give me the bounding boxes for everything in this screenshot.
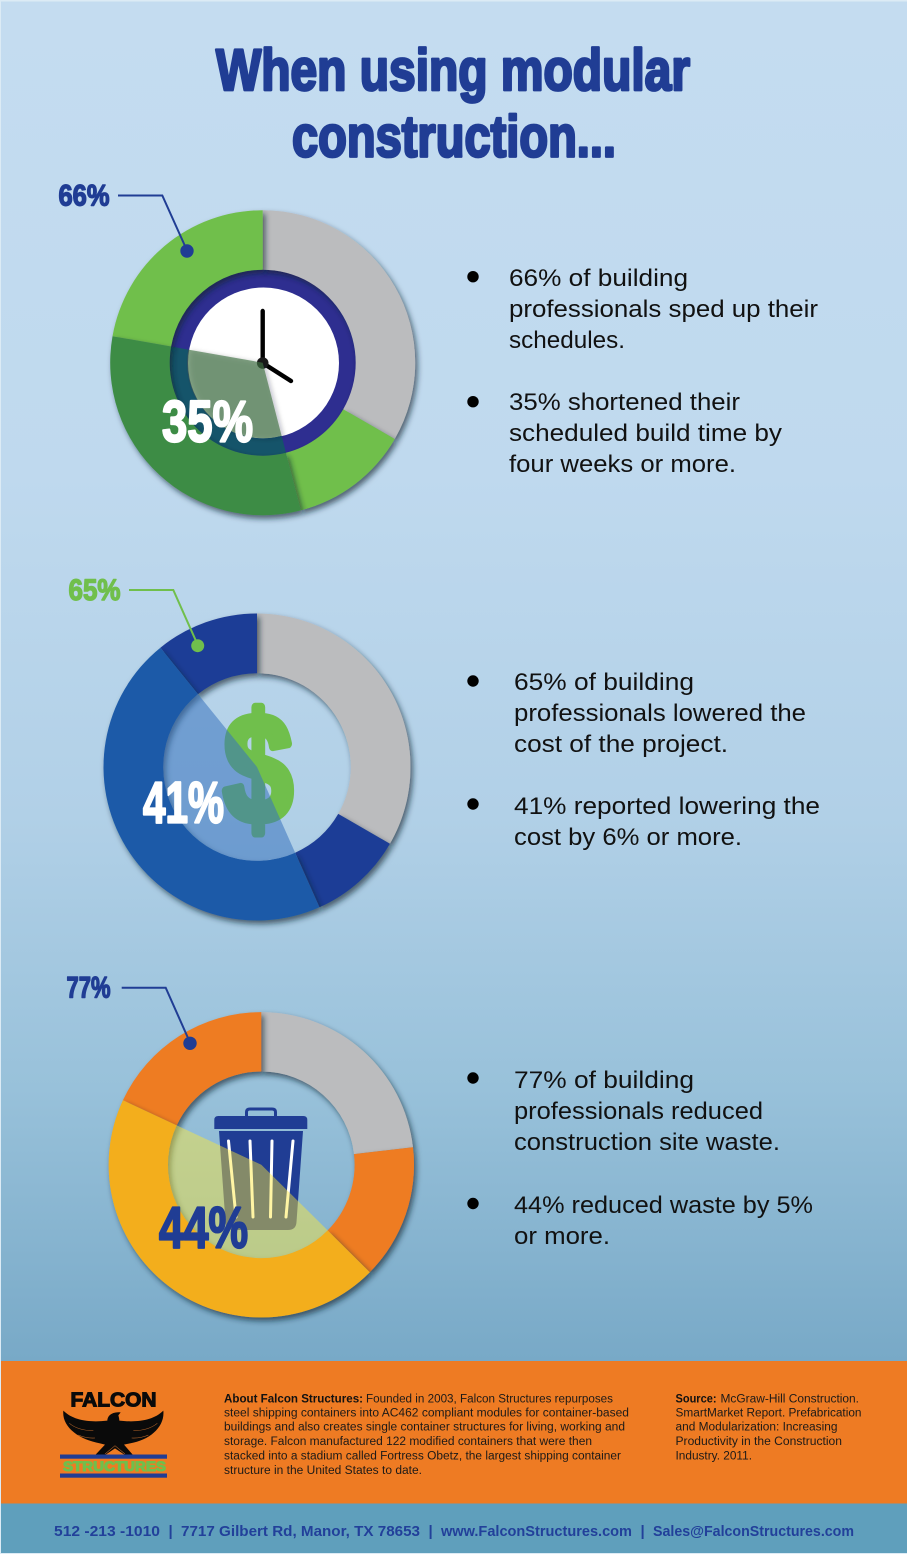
text block: schedule bullets: schedules. [509,327,625,354]
text block: waste bullets: professionals reduced [514,1098,763,1125]
text block: cost bullets: 41% reported lowering the [514,793,820,820]
text block: waste bullets: 44% reduced waste by 5% [514,1192,813,1219]
icon: clock [169,269,357,457]
text block: cost bullets: cost by 6% or more. [514,824,742,851]
contact details: | [168,1523,173,1540]
label: 44%: 44% [159,1196,248,1260]
label: 77%: 77% [66,972,110,1004]
text block: schedule bullets: four weeks or more. [509,451,736,478]
donut segment: 66% lower part [286,409,395,510]
wedge: 41% overlay [163,694,295,861]
icon: trash can [214,1109,307,1230]
label: 41%: 41% [143,770,224,836]
panel: cost donut chart [68,574,410,920]
label: 65%: 65% [68,574,120,607]
text block: about Falcon Structures: stacked into a stadium called Fortress Obetz, the largest shipping container [224,1450,621,1462]
text block: source: Source: [676,1394,716,1406]
icon: dollar sign: $ [224,682,292,855]
donut segment: 44% [109,1100,370,1317]
text block: cost bullets: 65% of building [514,669,694,696]
donut segment: 41% [104,648,319,920]
contact details: | [640,1523,645,1540]
label: 35%: 35% [162,390,253,454]
text block: source: SmartMarket Report. Prefabrication [676,1408,862,1420]
text block: waste bullets: construction site waste. [514,1129,780,1156]
text block: waste bullets: 77% of building [514,1067,694,1094]
donut segment: remaining grey [257,614,410,844]
text block: about Falcon Structures: structure in the United States to date. [224,1465,422,1477]
text block: about Falcon Structures: steel shipping containers into AC462 compliant modules for container-based [224,1408,629,1420]
text block: cost bullets: professionals lowered the [514,700,806,727]
title: When using modular [216,38,690,103]
contact details [54,1523,854,1540]
logo: Falcon Structures [60,1390,167,1478]
logo: Falcon Structures: FALCON [70,1390,156,1412]
text block: waste bullets: or more. [514,1223,610,1250]
title: construction... [292,104,616,170]
callout: 65% leader [129,590,204,652]
donut segment: 66% upper part [113,210,263,347]
title [216,38,690,170]
donut segment: 77% upper part [123,1012,261,1125]
text block: source: McGraw-Hill Construction. [720,1394,859,1406]
donut segment: 65% lower part [295,814,390,907]
text block: waste bullets [467,1067,813,1250]
text block: source [676,1394,862,1462]
donut segment: 77% lower part [328,1147,414,1272]
text block: source: Industry. 2011. [676,1450,752,1462]
text block: about Falcon Structures: Founded in 2003, Falcon Structures repurposes [366,1394,613,1406]
contact details: 7717 Gilbert Rd, Manor, TX 78653 [181,1523,420,1540]
donut segment: 35% [110,336,301,515]
text block: about Falcon Structures [224,1394,629,1477]
panel: schedule donut chart [58,180,415,515]
donut segment: remaining grey [261,1012,413,1154]
panel: footer orange band [1,1361,907,1504]
text block: cost bullets: cost of the project. [514,731,728,758]
text block: schedule bullets: scheduled build time by [509,420,782,447]
text block: cost bullets [467,669,820,851]
callout: 77% leader [122,988,197,1050]
text block: about Falcon Structures: storage. Falcon manufactured 122 modified containers that were then [224,1436,592,1448]
contact details: | [428,1523,433,1540]
donut segment: 65% upper part [160,614,257,694]
text block: schedule bullets: professionals sped up their [509,296,818,323]
logo: Falcon Structures: STRUCTURES [63,1459,166,1474]
text block: schedule bullets [467,265,818,478]
text block: schedule bullets: 66% of building [509,265,688,292]
text block: about Falcon Structures: buildings and also creates single container structures for living, working and [224,1422,625,1434]
text block: about Falcon Structures: About Falcon Structures: [224,1394,363,1406]
callout: 66% leader [118,196,194,258]
panel: waste donut chart [66,972,414,1317]
label: 66%: 66% [58,180,110,212]
donut segment: remaining grey [263,210,415,439]
contact details: www.FalconStructures.com [440,1523,632,1540]
panel: contact bar [1,1504,907,1553]
text block: source: Productivity in the Construction [676,1436,842,1448]
contact details: 512 -213 -1010 [54,1523,160,1540]
text block: source: and Modularization: Increasing [676,1422,838,1434]
text block: schedule bullets: 35% shortened their [509,389,740,416]
wedge: 44% overlay [168,1125,328,1258]
contact details: Sales@FalconStructures.com [653,1523,854,1540]
